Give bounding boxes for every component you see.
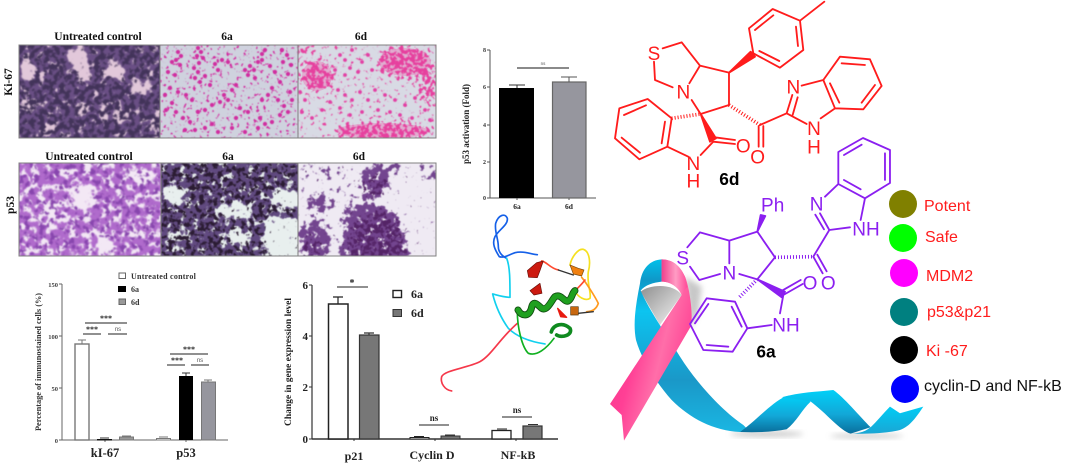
ns labels: ns	[115, 327, 121, 333]
significance labels	[86, 314, 195, 365]
ribbon: cancer awareness	[610, 259, 923, 441]
atom labels: O	[736, 137, 751, 158]
atom labels: S	[676, 248, 689, 269]
key: Safe	[889, 224, 958, 252]
row label p53: p53	[5, 196, 17, 214]
sheet: dark orange	[571, 307, 578, 315]
ribbon: crest band	[782, 390, 871, 434]
atom labels: N	[810, 195, 824, 216]
ns label: ns	[541, 61, 546, 66]
bar chart: p53 activation	[461, 48, 596, 211]
atom labels	[648, 44, 821, 192]
significance labels: ***	[100, 314, 112, 323]
atom labels: NH	[852, 220, 880, 241]
atom labels: S	[648, 44, 660, 65]
micrograph: Ki-67 compound 6a	[160, 46, 298, 138]
atom labels: H	[807, 137, 821, 158]
coil: red tail	[441, 323, 517, 391]
significance bracket	[517, 67, 569, 69]
y tick labels: 50	[52, 386, 58, 393]
wedge bonds	[701, 52, 755, 142]
legend: 6d	[131, 298, 140, 307]
micrograph: p53 untreated control	[20, 164, 160, 256]
atom labels: Ph	[761, 195, 784, 216]
bars: Cyclin D	[410, 435, 460, 439]
legend	[393, 287, 424, 320]
ns labels	[115, 327, 203, 364]
micrograph: p53 compound 6d	[298, 164, 436, 256]
micrograph heading row 2: 6a	[222, 151, 234, 163]
micrograph heading row 2: 6d	[353, 151, 366, 163]
atom labels: NH	[772, 316, 800, 337]
x category labels: p53	[176, 446, 196, 460]
key: Potent: Potent	[924, 198, 971, 215]
significance labels: ***	[183, 345, 195, 354]
atom labels: O	[821, 273, 836, 294]
atom labels: N	[786, 77, 800, 98]
bar chart: percentage of immunostained cells	[34, 272, 228, 460]
atom labels	[676, 195, 880, 337]
y axis label: Change in gene expression level	[284, 298, 294, 426]
helix: small green	[551, 325, 571, 336]
ribbon shadows	[641, 277, 903, 438]
y tick labels: 0	[55, 438, 58, 445]
bars: NF-kB	[492, 424, 542, 439]
legend: 6a	[131, 285, 139, 294]
wedge bonds	[757, 215, 785, 297]
ribbon: pink top highlight	[662, 259, 687, 295]
micrograph heading row 1: Untreated control	[54, 31, 142, 43]
stained cell dots	[300, 50, 430, 120]
key: p53 and p21	[890, 298, 991, 326]
thiazolidine and pyrrolidine rings	[687, 232, 775, 280]
coil: dark link	[558, 270, 593, 313]
carbonyl and benzimidazole	[759, 57, 882, 147]
significance brackets	[83, 323, 209, 365]
micrograph heading row 1: 6d	[355, 31, 368, 43]
bars: p53 group	[156, 373, 216, 440]
x category labels: 6d	[565, 202, 574, 211]
panel: immunostaining micrographs	[3, 31, 446, 266]
key: MDM2: MDM2	[926, 268, 973, 285]
legend: 6a	[411, 287, 423, 301]
coil: cyan	[493, 258, 545, 344]
sheet: orange	[570, 265, 584, 276]
x category labels	[91, 446, 196, 460]
hash bonds	[729, 105, 760, 125]
legend: activity key	[889, 190, 1062, 403]
micrograph: p53 compound 6a	[162, 164, 298, 256]
y tick labels	[302, 280, 308, 446]
y tick labels: 4	[483, 123, 486, 129]
significance brackets	[337, 287, 532, 425]
key: Safe: Safe	[925, 229, 958, 246]
significance labels: ns	[430, 413, 439, 423]
y tick labels: 150	[48, 282, 58, 289]
significance labels: *	[350, 278, 354, 289]
oxindole	[690, 280, 803, 352]
significance labels	[350, 278, 522, 423]
oxindole	[615, 99, 735, 159]
atom labels: N	[722, 263, 736, 284]
y tick labels	[48, 282, 58, 445]
ribbon: tail band	[851, 407, 923, 434]
bars: p21	[328, 297, 379, 439]
hash bonds	[775, 251, 813, 263]
coil: yellow loop	[570, 249, 590, 299]
axes and ticks	[309, 285, 558, 441]
atom labels: N	[676, 83, 690, 104]
helix: large green	[518, 291, 575, 315]
micrograph heading row 2	[45, 151, 366, 163]
ribbon: pink band	[610, 259, 692, 441]
x category labels: p21	[345, 449, 363, 463]
y axis label: p53 activation (Fold)	[461, 84, 471, 164]
significance labels: ***	[171, 356, 183, 365]
strand: red lower	[558, 308, 567, 317]
row label Ki-67: Ki-67	[3, 68, 15, 96]
bar: 6d	[552, 77, 586, 198]
carbonyl and benzimidazole	[813, 138, 890, 273]
y tick labels: 6	[302, 280, 308, 292]
micrograph heading row 1	[54, 31, 368, 43]
legend	[118, 272, 197, 307]
micrograph: Ki-67 untreated control	[20, 46, 160, 138]
axes and ticks	[59, 284, 228, 442]
compound label 6d: 6d	[719, 169, 739, 189]
thiazolidine and pyrrolidine rings	[654, 42, 729, 114]
axes and ticks	[487, 50, 596, 200]
atom labels: O	[750, 147, 765, 168]
key: MDM2	[890, 259, 973, 287]
x category labels: Cyclin D	[410, 448, 455, 462]
y tick labels: 8	[483, 48, 486, 54]
stained cell dots	[165, 48, 292, 132]
x category labels: NF-kB	[501, 448, 535, 462]
tolyl ring with methyl	[749, 2, 824, 68]
key: p53 and p21: p53&p21	[927, 304, 991, 321]
x category labels: 6a	[513, 202, 521, 211]
key: Ki-67	[890, 336, 968, 364]
y axis label: Percentage of immunostained cells (%)	[34, 293, 43, 431]
chemical structure: compound 6d	[615, 2, 882, 192]
micrograph heading row 1: 6a	[221, 31, 233, 43]
key: cyclin-D and NF-kB: cyclin-D and NF-kB	[924, 378, 1062, 395]
atom labels: O	[803, 273, 817, 294]
key: Ki-67: Ki -67	[926, 343, 968, 360]
x category labels	[345, 448, 535, 463]
x category labels: kI-67	[91, 446, 119, 460]
coil: red upper	[542, 261, 585, 297]
coil: orange	[582, 277, 598, 312]
key: Potent	[889, 190, 971, 218]
y tick labels: 0	[483, 196, 486, 202]
compound label 6a: 6a	[756, 342, 776, 362]
ribbon: blue loop and band	[635, 259, 747, 432]
legend: 6d	[411, 306, 424, 320]
y tick labels: 0	[302, 434, 308, 446]
coil: green loop	[517, 312, 554, 354]
atom labels: H	[686, 171, 700, 192]
y tick labels: 2	[483, 160, 486, 166]
significance labels: ***	[86, 325, 98, 334]
y tick labels	[483, 48, 486, 202]
micrograph heading row 2: Untreated control	[45, 151, 133, 163]
y tick labels: 2	[302, 382, 308, 394]
protein ribbon structure: MDM2	[441, 215, 598, 391]
key: cyclin-D and NF-kB	[891, 375, 1062, 403]
significance labels: ns	[513, 405, 522, 415]
bar chart: change in gene expression level	[284, 278, 558, 463]
micrograph frames	[19, 45, 436, 256]
ns labels: ns	[197, 358, 203, 364]
ribbon: rising fold	[740, 395, 811, 432]
bar: 6a	[499, 85, 534, 198]
chemical structure: compound 6a	[676, 138, 890, 362]
atom labels: N	[807, 119, 821, 140]
y tick labels: 100	[48, 334, 58, 341]
atom labels: N	[686, 154, 700, 175]
helix: red	[527, 261, 543, 295]
legend: Untreated control	[131, 272, 197, 281]
y tick labels: 4	[302, 331, 308, 343]
x category labels	[513, 202, 574, 211]
coil: blue	[494, 215, 537, 258]
micrograph: Ki-67 compound 6d	[298, 46, 436, 138]
y tick labels: 6	[483, 85, 486, 91]
bars: Ki-67 group	[75, 340, 134, 440]
